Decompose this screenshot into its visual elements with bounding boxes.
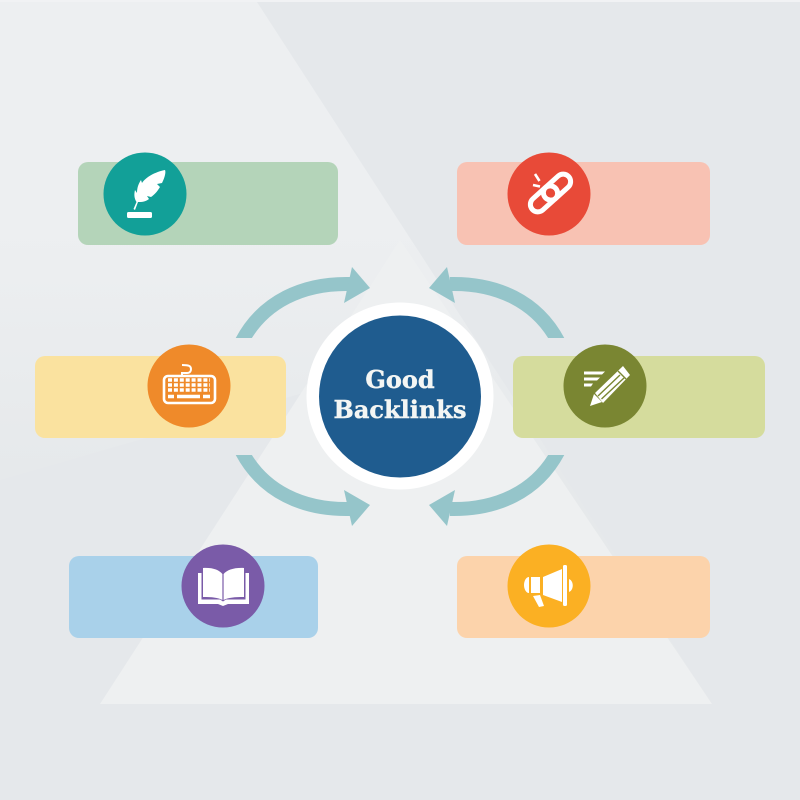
panel: middle left yellow [35,356,286,438]
arrow: bottom right [429,448,560,526]
title: Good [365,365,435,394]
panel: bottom left blue [69,556,318,638]
icon: megaphone [508,544,590,628]
icon: broken chain link [508,152,590,236]
arrow: top right [429,267,560,345]
arrow: top left [240,267,370,345]
icon: open book [182,544,264,628]
panel: top right red [457,162,710,245]
arrow: bottom left [240,448,370,526]
icon: pencil with lines [564,344,646,428]
center hub [306,302,494,490]
panel: middle right olive [513,356,765,438]
icon: keyboard [148,344,230,428]
panel: bottom right orange [457,556,710,638]
panel: top left green [78,162,338,245]
title: Backlinks [334,395,466,424]
icon: feather quill [104,152,186,236]
